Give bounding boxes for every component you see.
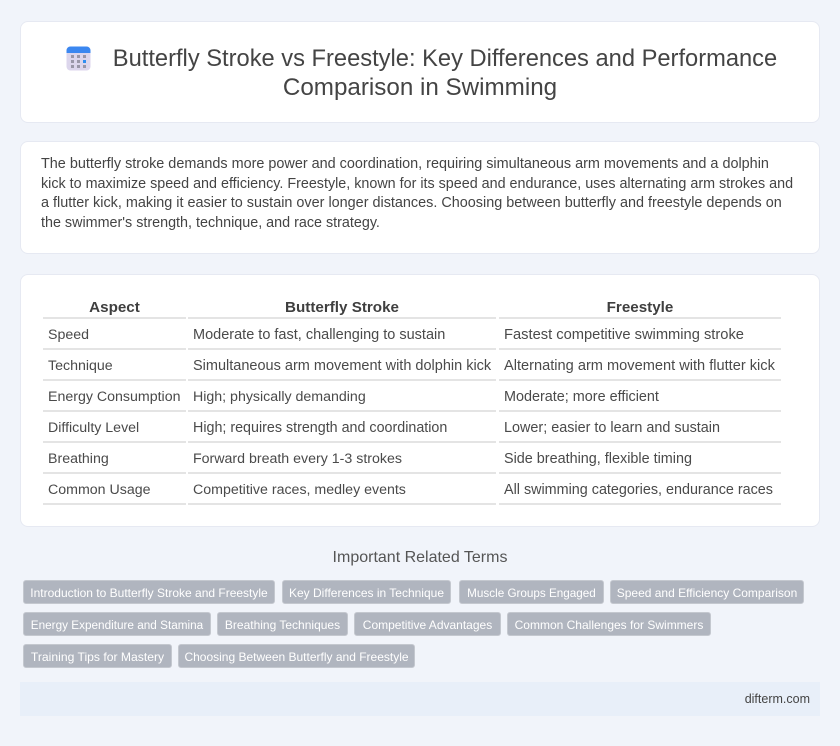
icon: calendar <box>66 46 90 70</box>
comparison table: Simultaneous arm movement with dolphin kick <box>193 358 491 374</box>
intro paragraph: The butterfly stroke demands more power and coordination, requiring simultaneous arm movements and a dolphin <box>41 156 769 172</box>
comparison table: High; requires strength and coordination <box>193 420 447 436</box>
comparison table: Lower; easier to learn and sustain <box>504 420 720 436</box>
comparison table: Moderate; more efficient <box>504 389 659 405</box>
related term tags: Training Tips for Mastery <box>31 650 164 664</box>
intro paragraph card <box>20 141 820 254</box>
comparison table: High; physically demanding <box>193 389 366 405</box>
comparison table: Side breathing, flexible timing <box>504 451 692 467</box>
related term tags: Muscle Groups Engaged <box>467 587 596 600</box>
comparison table: Breathing <box>48 451 109 467</box>
comparison table card <box>20 274 820 527</box>
related term tags: Speed and Efficiency Comparison <box>617 586 797 600</box>
comparison table <box>43 299 781 505</box>
related term tags: Common Challenges for Swimmers <box>515 618 703 632</box>
comparison table: Competitive races, medley events <box>193 482 406 498</box>
comparison table: Common Usage <box>48 482 151 498</box>
comparison table: Fastest competitive swimming stroke <box>504 327 744 343</box>
comparison table: Alternating arm movement with flutter kick <box>504 358 775 374</box>
title: Butterfly Stroke vs Freestyle: Key Differences and Performance <box>113 46 777 72</box>
related term tags: Key Differences in Technique <box>289 586 444 600</box>
related term tags: Introduction to Butterfly Stroke and Freestyle <box>30 586 268 600</box>
footer bar <box>20 682 820 716</box>
intro paragraph: a flutter kick, making it easier to sustain over longer distances. Choosing between butterfly and freestyle depends on <box>41 195 782 211</box>
comparison table: Forward breath every 1-3 strokes <box>193 451 402 467</box>
comparison table: Freestyle <box>607 299 673 316</box>
related term tags: Breathing Techniques <box>225 618 340 632</box>
footer credit: difterm.com <box>745 692 810 706</box>
related term tags <box>23 580 804 668</box>
comparison table: All swimming categories, endurance races <box>504 482 773 498</box>
comparison table: Technique <box>48 358 113 374</box>
comparison table: Energy Consumption <box>48 389 180 405</box>
comparison table: Butterfly Stroke <box>285 299 399 316</box>
comparison table: Difficulty Level <box>48 420 139 436</box>
intro paragraph <box>41 156 793 231</box>
related terms heading: Important Related Terms <box>333 549 507 566</box>
related term tags: Competitive Advantages <box>363 618 492 632</box>
related term tags: Energy Expenditure and Stamina <box>31 619 203 632</box>
title: Comparison in Swimming <box>283 74 557 101</box>
related term tags: Choosing Between Butterfly and Freestyle <box>184 650 409 664</box>
header card <box>20 21 820 123</box>
comparison table: Speed <box>48 327 89 343</box>
comparison table: Moderate to fast, challenging to sustain <box>193 327 445 343</box>
title <box>113 46 777 101</box>
comparison table: Aspect <box>89 299 140 316</box>
intro paragraph: kick to maximize speed and efficiency. Freestyle, known for its speed and endurance, uses alternating arm strokes and <box>41 176 793 192</box>
intro paragraph: the swimmer's strength, technique, and race strategy. <box>41 215 380 231</box>
